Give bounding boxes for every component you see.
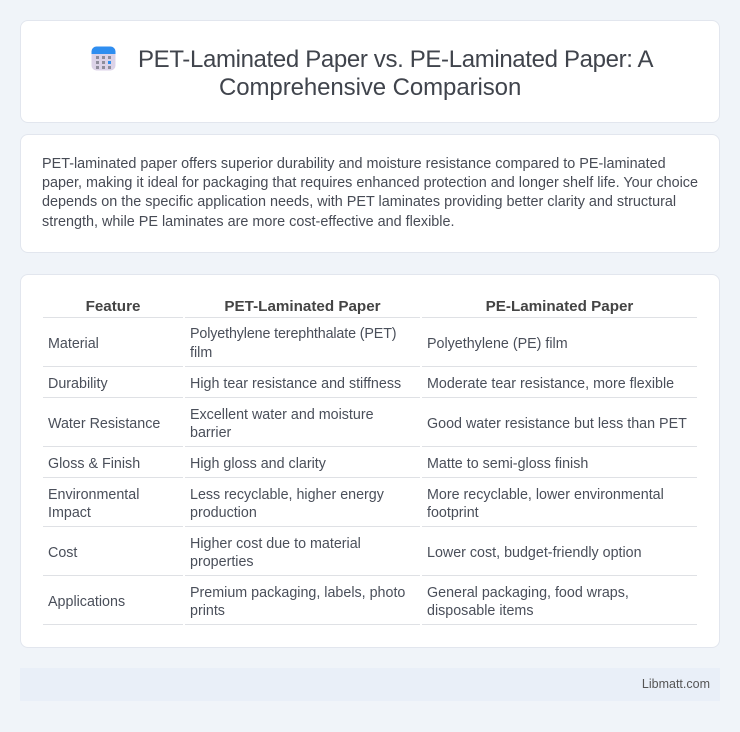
table: Polyethylene (PE) film — [427, 336, 568, 352]
table: properties — [190, 554, 254, 570]
table: barrier — [190, 425, 231, 441]
table: High tear resistance and stiffness — [190, 376, 401, 392]
summary text: strength, while PE laminates are more cost-effective and flexible. — [42, 214, 454, 230]
table: Gloss & Finish — [48, 456, 140, 472]
table — [43, 298, 697, 625]
table: Matte to semi-gloss finish — [427, 456, 588, 472]
header: PET-Laminated Paper: PET-Laminated Paper — [224, 298, 381, 315]
table: Higher cost due to material — [190, 536, 361, 552]
summary text: depends on the specific application needs, with PET laminates providing better clarity and structural — [42, 194, 676, 210]
table: Less recyclable, higher energy — [190, 487, 384, 503]
table: Polyethylene terephthalate (PET) — [190, 326, 396, 342]
table: High gloss and clarity — [190, 456, 326, 472]
table: Excellent water and moisture — [190, 407, 374, 423]
table: Moderate tear resistance, more flexible — [427, 376, 674, 392]
table: Applications — [48, 594, 125, 610]
table: prints — [190, 603, 225, 619]
panel: title card — [20, 20, 720, 123]
table: disposable items — [427, 603, 534, 619]
table: footprint — [427, 505, 479, 521]
table: More recyclable, lower environmental — [427, 487, 664, 503]
table: production — [190, 505, 257, 521]
table: Premium packaging, labels, photo — [190, 585, 405, 601]
table: Durability — [48, 376, 108, 392]
table: Cost — [48, 545, 77, 561]
footer text: Libmatt.com — [642, 677, 710, 691]
table: Good water resistance but less than PET — [427, 416, 687, 432]
summary text: PET-laminated paper offers superior durability and moisture resistance compared to PE-laminated — [42, 156, 666, 172]
footer bar — [20, 668, 720, 701]
table: Water Resistance — [48, 416, 160, 432]
summary text: paper, making it ideal for packaging that requires enhanced protection and longer shelf life. Your choice — [42, 175, 698, 191]
table: film — [190, 345, 212, 361]
table: Impact — [48, 505, 91, 521]
summary text — [42, 156, 698, 230]
title line 2: Comprehensive Comparison — [219, 74, 521, 101]
header: PE-Laminated Paper: PE-Laminated Paper — [486, 298, 633, 315]
table: Environmental — [48, 487, 139, 503]
panel: summary — [20, 134, 720, 253]
title: PET-Laminated Paper vs. PE-Laminated Paper: A — [138, 46, 653, 73]
table: Lower cost, budget-friendly option — [427, 545, 642, 561]
header: Feature: Feature — [86, 298, 140, 315]
panel: comparison table — [20, 274, 720, 648]
table: General packaging, food wraps, — [427, 585, 629, 601]
table: Material — [48, 336, 99, 352]
icon: calendar — [92, 46, 116, 70]
